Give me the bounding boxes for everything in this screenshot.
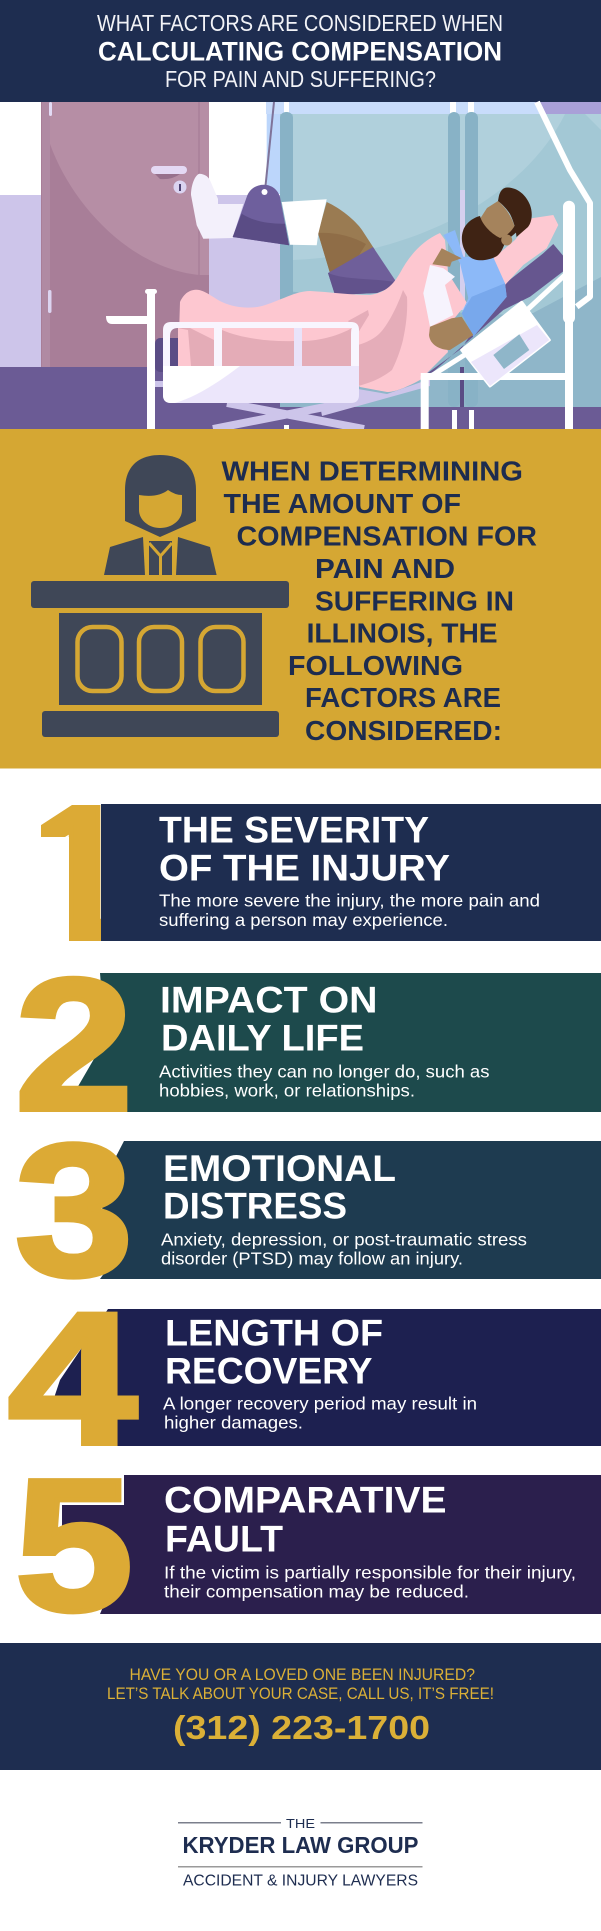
factor 5: comparative fault: FAULT xyxy=(165,1519,283,1560)
factor 4: length of recovery: 4 xyxy=(8,1274,137,1484)
factor 4: length of recovery: A longer recovery period may result in xyxy=(163,1393,477,1413)
call to action banner xyxy=(0,1643,601,1770)
header banner: FOR PAIN AND SUFFERING? xyxy=(165,66,436,92)
intro text: WHEN DETERMINING xyxy=(222,456,523,487)
logo: The Kryder Law Group: ACCIDENT & INJURY LAWYERS xyxy=(183,1873,418,1890)
factor 5: comparative fault: their compensation may be reduced. xyxy=(164,1581,469,1601)
intro text: CONSIDERED: xyxy=(305,715,502,746)
factor 2: impact on daily life xyxy=(15,940,601,1150)
factor 4: length of recovery: RECOVERY xyxy=(165,1350,373,1391)
factor 2: impact on daily life: 2 xyxy=(15,940,133,1150)
factor 5: comparative fault xyxy=(15,1440,601,1650)
intro text: THE AMOUNT OF xyxy=(224,488,461,519)
logo: The Kryder Law Group xyxy=(178,1816,422,1890)
header banner xyxy=(0,0,601,102)
leg in cast and sling xyxy=(191,102,397,295)
factor 1: severity of the injury xyxy=(41,804,601,941)
intro text: SUFFERING IN xyxy=(315,586,514,617)
logo: The Kryder Law Group: THE xyxy=(286,1816,315,1831)
factor 5: comparative fault: If the victim is partially responsible for their injury, xyxy=(164,1562,576,1582)
icon: judge at bench xyxy=(31,455,289,737)
factor 4: length of recovery xyxy=(8,1274,601,1484)
patient and blanket xyxy=(178,187,567,392)
factor 1: severity of the injury: The more severe the injury, the more pain and xyxy=(159,891,540,911)
bed frame xyxy=(106,102,590,429)
call to action banner: (312) 223-1700 xyxy=(173,1709,430,1746)
factor 3: emotional distress xyxy=(15,1105,601,1315)
call to action banner: HAVE YOU OR A LOVED ONE BEEN INJURED? xyxy=(130,1665,475,1684)
factor 2: impact on daily life: IMPACT ON xyxy=(160,980,378,1021)
factor 2: impact on daily life: Activities they can no longer do, such as xyxy=(159,1061,490,1081)
factor 3: emotional distress: 3 xyxy=(15,1105,133,1315)
gold intro panel xyxy=(0,429,601,768)
factor 4: length of recovery: higher damages. xyxy=(164,1413,303,1433)
door xyxy=(41,102,209,367)
illustration: injured patient in hospital bed xyxy=(0,102,601,429)
factor 5: comparative fault: COMPARATIVE xyxy=(164,1480,446,1521)
intro text: FOLLOWING xyxy=(288,650,463,681)
factor 3: emotional distress: DISTRESS xyxy=(163,1185,347,1226)
intro text xyxy=(222,456,537,746)
intro text: ILLINOIS, THE xyxy=(307,618,498,649)
factor 2: impact on daily life: hobbies, work, or relationships. xyxy=(159,1081,415,1101)
factor 1: severity of the injury: 1 xyxy=(26,766,134,983)
factor 1: severity of the injury: OF THE INJURY xyxy=(159,848,450,889)
factor 4: length of recovery: LENGTH OF xyxy=(165,1313,383,1354)
call to action banner: LET’S TALK ABOUT YOUR CASE, CALL US, IT’S FREE! xyxy=(107,1684,494,1703)
header banner: CALCULATING COMPENSATION xyxy=(98,36,502,66)
factor 2: impact on daily life: DAILY LIFE xyxy=(161,1017,364,1058)
factor 1: severity of the injury: THE SEVERITY xyxy=(159,809,429,850)
factor 1: severity of the injury: suffering a person may experience. xyxy=(159,910,448,930)
factor 3: emotional distress: disorder (PTSD) may follow an injury. xyxy=(161,1248,463,1268)
logo: The Kryder Law Group: KRYDER LAW GROUP xyxy=(182,1832,418,1858)
intro text: PAIN AND xyxy=(315,553,455,584)
intro text: COMPENSATION FOR xyxy=(236,521,537,552)
header banner: WHAT FACTORS ARE CONSIDERED WHEN xyxy=(97,10,503,36)
factor 3: emotional distress: Anxiety, depression, or post-traumatic stress xyxy=(161,1229,527,1249)
intro text: FACTORS ARE xyxy=(305,682,501,713)
factor 3: emotional distress: EMOTIONAL xyxy=(163,1148,396,1189)
factor 5: comparative fault: 5 xyxy=(15,1440,133,1650)
